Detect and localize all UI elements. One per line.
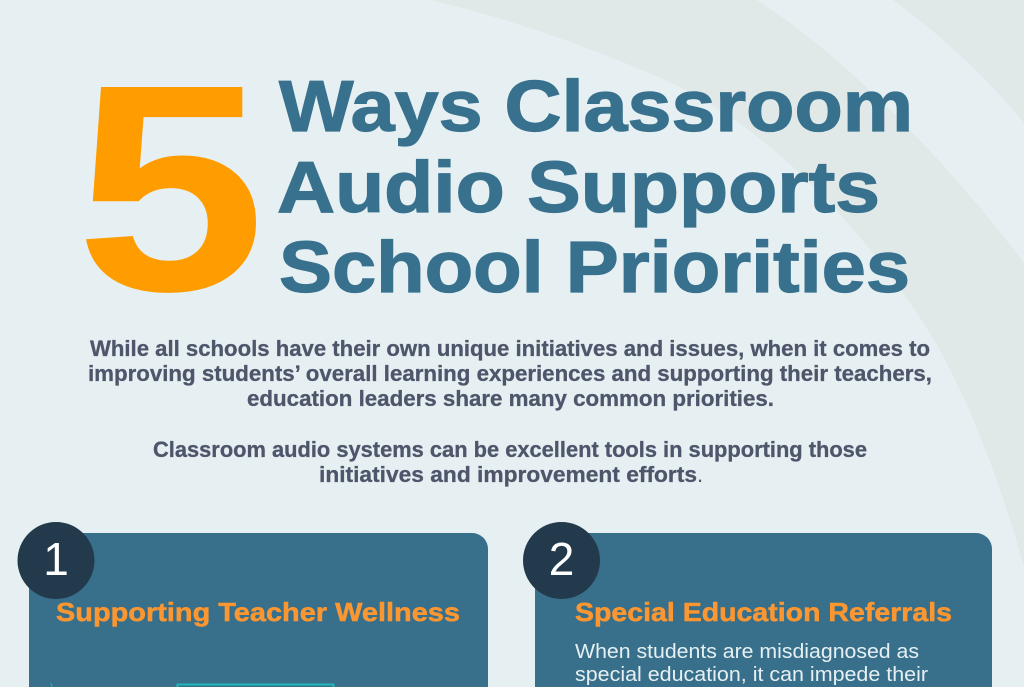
number badge 2 xyxy=(523,522,600,599)
panel body text: When students are misdiagnosed as xyxy=(575,641,919,663)
big numeral 5: 5 xyxy=(76,23,266,353)
number badge 2: 2 xyxy=(549,533,574,585)
heading: special education referrals: Special Education Referrals xyxy=(575,597,952,627)
supporting paragraph: Classroom audio systems can be excellent tools in supporting those xyxy=(153,437,867,462)
panel: supporting teacher wellness xyxy=(18,522,488,687)
title: Audio Supports xyxy=(277,148,880,228)
intro paragraph: improving students’ overall learning experiences and supporting their teachers, xyxy=(88,361,932,386)
number badge 1: 1 xyxy=(43,533,69,585)
panel: special education referrals xyxy=(523,522,992,687)
panel body text: special education, it can impede their xyxy=(575,664,928,686)
supporting paragraph: initiatives and improvement efforts xyxy=(319,462,697,487)
intro paragraph xyxy=(88,336,932,411)
title: Ways Classroom xyxy=(279,67,913,147)
heading: supporting teacher wellness: Supporting Teacher Wellness xyxy=(56,597,460,627)
number badge 1 xyxy=(18,522,94,599)
illustration: teal screen frame xyxy=(178,684,334,687)
title xyxy=(277,67,913,308)
intro paragraph: While all schools have their own unique initiatives and issues, when it comes to xyxy=(90,336,930,361)
supporting paragraph: . xyxy=(697,462,703,487)
panel body text xyxy=(575,641,928,686)
illustration: teal tick mark xyxy=(50,683,52,687)
intro paragraph: education leaders share many common priorities. xyxy=(247,386,774,411)
title: School Priorities xyxy=(279,228,910,308)
supporting paragraph xyxy=(153,437,867,487)
